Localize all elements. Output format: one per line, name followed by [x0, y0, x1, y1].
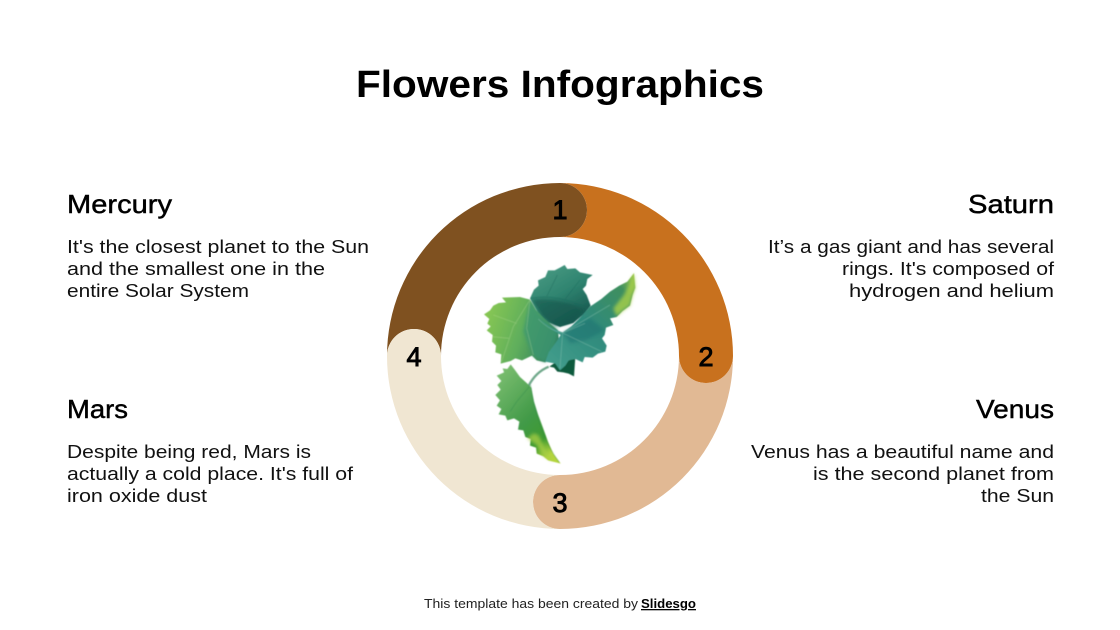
- segment 4: cream: [387, 329, 560, 529]
- heading: Saturn: Saturn: [968, 189, 1054, 219]
- donut chart: [387, 183, 733, 529]
- leaf: right: [538, 273, 635, 370]
- text block: Mars: actually a cold place. It's full of: [67, 463, 354, 484]
- leaf: lower: [495, 364, 561, 464]
- title: Flowers Infographics: [356, 64, 764, 106]
- footer credit: This template has been created by: [424, 596, 639, 611]
- text block: Saturn: It’s a gas giant and has several: [768, 236, 1054, 257]
- text block: Mars: [67, 441, 354, 506]
- heading: Mars: Mars: [67, 394, 128, 424]
- number 1: 1: [552, 195, 568, 225]
- panel: Venus: [751, 394, 1054, 506]
- text block: Saturn: [768, 236, 1055, 301]
- text block: Mars: Despite being red, Mars is: [67, 441, 311, 462]
- text block: Venus: Venus has a beautiful name and: [751, 441, 1054, 462]
- text block: Mars: iron oxide dust: [67, 485, 207, 506]
- panel: Mercury: [67, 189, 369, 301]
- text block: Saturn: rings. It's composed of: [842, 258, 1055, 279]
- panel: Saturn: [768, 189, 1055, 301]
- number 2: 2: [698, 342, 714, 372]
- leaf: left: [484, 297, 559, 364]
- number 4: 4: [406, 342, 422, 372]
- icon: green leaves: [484, 265, 635, 464]
- leaf: top: [530, 265, 593, 327]
- segment 3: tan: [533, 356, 733, 529]
- text block: Venus: [751, 441, 1054, 506]
- segment 2: orange: [560, 183, 733, 383]
- text block: Mercury: [67, 236, 369, 301]
- text block: Mercury: It's the closest planet to the Sun: [67, 236, 369, 257]
- text block: Venus: the Sun: [981, 485, 1054, 506]
- link: Slidesgo: Slidesgo: [641, 596, 696, 611]
- panel: Mars: [67, 394, 354, 506]
- leaf: dark underside: [549, 357, 575, 376]
- heading: Mercury: Mercury: [67, 189, 172, 219]
- text block: Venus: is the second planet from: [813, 463, 1054, 484]
- text block: Saturn: hydrogen and helium: [849, 280, 1054, 301]
- number 3: 3: [552, 488, 568, 518]
- text block: Mercury: entire Solar System: [67, 280, 249, 301]
- text block: Mercury: and the smallest one in the: [67, 258, 325, 279]
- stem: [529, 367, 549, 386]
- heading: Venus: Venus: [976, 394, 1054, 424]
- segment 1: brown: [387, 183, 587, 356]
